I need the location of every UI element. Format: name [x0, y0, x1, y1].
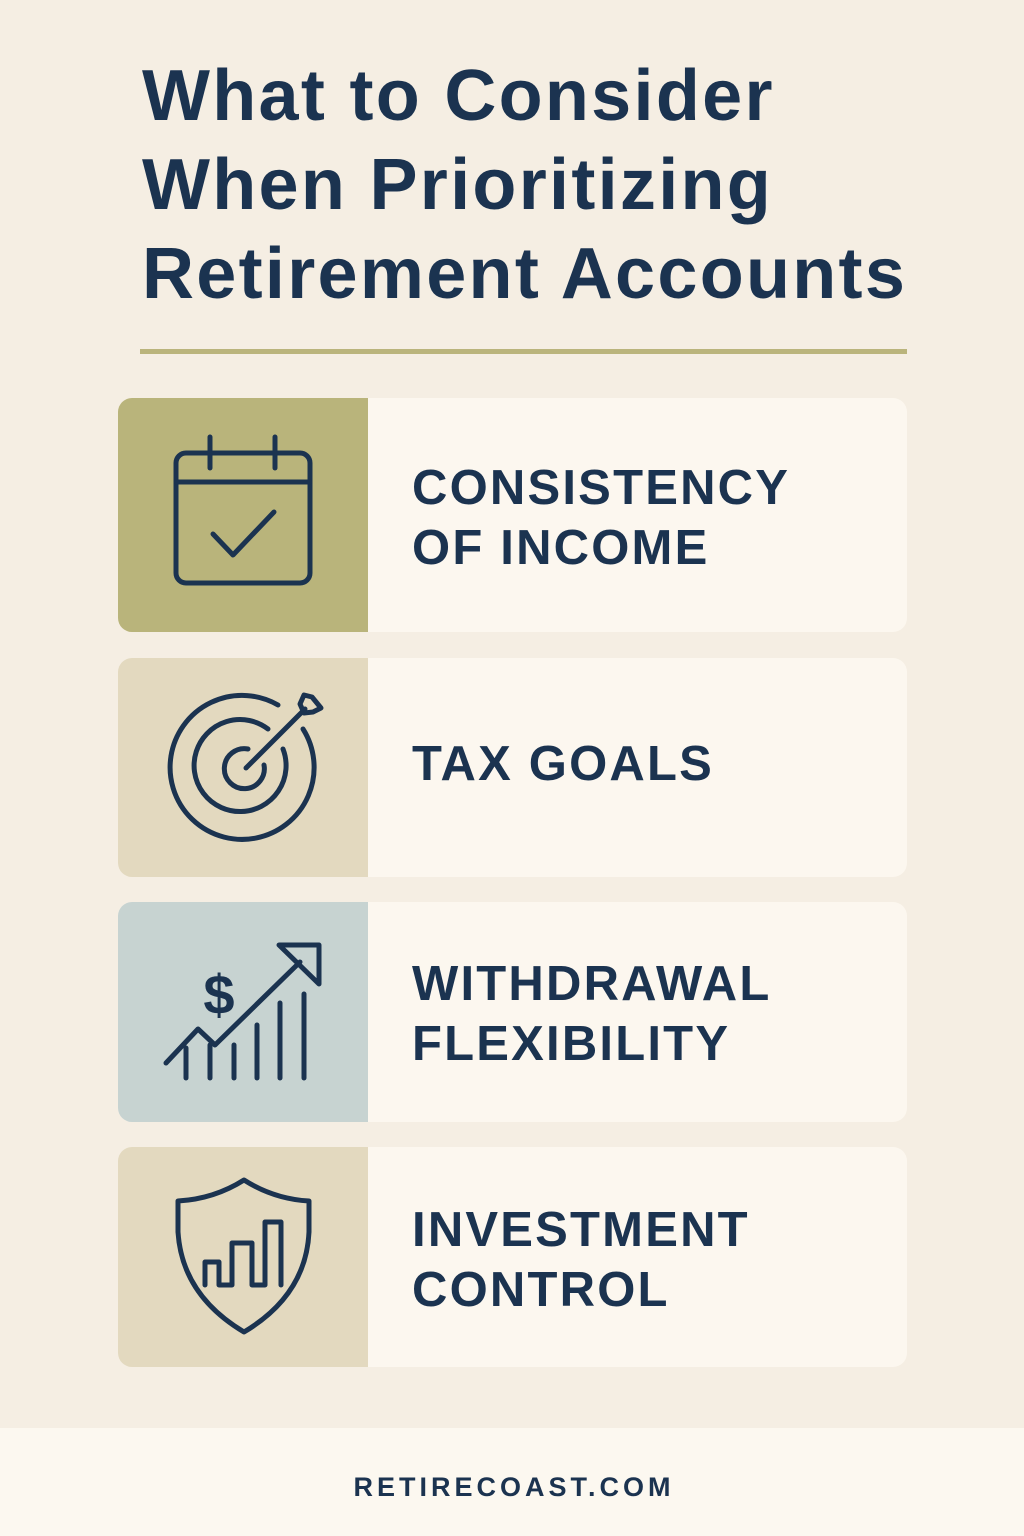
card: withdrawal flexibility — [118, 902, 907, 1122]
text: CONTROL — [412, 1263, 670, 1317]
footer — [0, 1428, 1024, 1536]
icon panel: calendar — [118, 398, 368, 632]
card: tax goals — [118, 658, 907, 877]
text — [412, 957, 772, 1071]
text: CONSISTENCY — [412, 461, 790, 515]
footer: RETIRECOAST.COM — [353, 1472, 674, 1502]
icon panel: target — [118, 658, 368, 877]
icon panel: growth chart: $ — [203, 963, 235, 1026]
text: INVESTMENT — [412, 1203, 750, 1257]
text — [412, 461, 790, 575]
title: When Prioritizing — [142, 145, 773, 225]
card: consistency of income — [118, 398, 907, 632]
title — [142, 56, 907, 314]
text: TAX GOALS — [412, 737, 714, 791]
icon panel: growth chart — [118, 902, 368, 1122]
title: What to Consider — [142, 56, 775, 136]
icon panel: shield — [118, 1147, 368, 1367]
text: WITHDRAWAL — [412, 957, 772, 1011]
text: OF INCOME — [412, 521, 709, 575]
title: Retirement Accounts — [142, 234, 907, 314]
text — [412, 1203, 750, 1317]
text: FLEXIBILITY — [412, 1017, 730, 1071]
card: investment control — [118, 1147, 907, 1367]
